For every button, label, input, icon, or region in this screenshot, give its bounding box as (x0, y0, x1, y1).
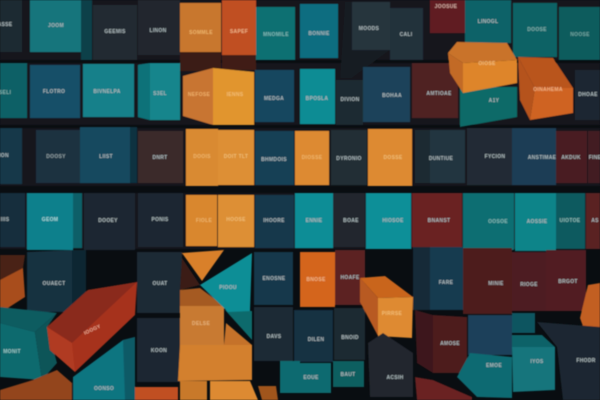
lower right blocks: FARE (439, 280, 454, 286)
lower right blocks: BRGOT (558, 279, 578, 285)
row 3 blocks (0, 127, 600, 186)
row 4 blocks: ENNIE (306, 218, 323, 224)
row 1 blocks (0, 0, 600, 78)
row 2 blocks: BOHAA (382, 93, 402, 99)
row 2 blocks: BPOSLA (306, 96, 328, 102)
row 4 blocks: OOSOE (488, 219, 508, 225)
row 4 blocks: IIIS (1, 217, 10, 223)
central dark columns: OUAT (152, 281, 168, 287)
lower middle blocks: EOUE (303, 375, 319, 381)
row 2 blocks: OINAHEMA (533, 87, 563, 93)
row 1 blocks: JOOM (48, 23, 64, 29)
lower right blocks: ACSIH (386, 375, 404, 381)
row 1 blocks: SAPEF (230, 29, 248, 35)
lower right blocks: FHODR (576, 358, 596, 364)
row 2 blocks: DIVION (340, 97, 360, 103)
row 5 left: broken stacked blocks: IOOGY (83, 323, 102, 337)
row 4 blocks: HIOSOE (382, 218, 404, 224)
lower right blocks: AMOSE (440, 341, 460, 347)
row 3 blocks: ANSTIMAE (528, 155, 557, 161)
row 3 blocks: DIOSSE (302, 155, 323, 161)
row 3 blocks: DOSSE (383, 155, 403, 161)
lower right blocks: IYOS (530, 359, 544, 365)
lower right blocks: MINIE (488, 281, 504, 287)
row 2 blocks: NEFOSE (188, 92, 211, 98)
row 1 blocks: LINON (149, 28, 167, 34)
row 5 left: broken stacked blocks (0, 250, 137, 400)
row 4 blocks: AS (591, 218, 599, 224)
row 3 blocks: DNRT (152, 155, 168, 161)
central dark columns: KOON (151, 348, 167, 354)
row 1 blocks: CALI (400, 32, 413, 38)
row 2 blocks: BIVNELPA (93, 89, 121, 95)
lower middle blocks: ENOSNE (263, 276, 286, 282)
row 3 blocks: DUNTIUE (429, 156, 454, 162)
row 4 blocks: IHOORE (263, 218, 285, 224)
row 2 blocks: DHOAE (578, 92, 598, 98)
row 1 blocks: MOODS (359, 26, 380, 32)
lower middle blocks: HOAFE (340, 275, 360, 281)
row 3 blocks: DYRONIO (336, 156, 362, 162)
row 4 blocks: AOSSIE (527, 219, 548, 225)
row 1 blocks: MNOMILE (263, 32, 289, 38)
row 3 blocks: DOOIS (193, 154, 211, 160)
row 3 blocks: FYCION (485, 154, 505, 160)
row 2 blocks: A1Y (489, 98, 500, 104)
row 1 blocks: NOOSE (570, 32, 590, 38)
row 2 blocks: MEDGA (264, 96, 284, 102)
row 2 blocks: IENNS (227, 92, 244, 98)
row 4 blocks (0, 193, 600, 251)
row 1 blocks: JOOSUE (435, 4, 458, 10)
lower middle blocks: BNOSE (306, 277, 326, 283)
lower middle blocks: DILEN (308, 337, 324, 343)
lower right blocks (368, 247, 600, 400)
row 4 blocks: UIOTOE (560, 218, 581, 224)
row 1 blocks: DOOSE (527, 27, 547, 33)
tilted orange box (360, 276, 413, 338)
row 4 blocks: BOAE (343, 218, 359, 224)
row 3 blocks: LIIST (99, 154, 113, 160)
row 1 blocks: SOMMLE (189, 30, 213, 36)
lower right blocks: RIOGE (520, 282, 538, 288)
lower middle blocks: DAVS (267, 334, 282, 340)
central dark columns (135, 252, 182, 400)
row 1 blocks: LINOGL (478, 19, 498, 25)
lower right blocks: EMOE (486, 363, 502, 369)
row 2 blocks (0, 42, 600, 127)
lower middle blocks: BAUT (340, 372, 356, 378)
row 2 blocks: S3EL (153, 91, 167, 97)
lower middle blocks (254, 250, 365, 393)
row 4 blocks: FIOLE (196, 218, 212, 224)
row 4 blocks: PONIS (151, 217, 169, 223)
row 1 blocks: BONNIE (308, 31, 330, 37)
center orange and teal shard cluster: DELSE (192, 321, 210, 327)
row 3 blocks: BHMDOIS (261, 157, 287, 163)
row 2 blocks: FLOTRO (43, 89, 65, 95)
row 5 left: broken stacked blocks: OUAECT (43, 281, 65, 287)
center orange and teal shard cluster (178, 250, 278, 400)
row 5 left: broken stacked blocks: MONIT (3, 349, 21, 355)
row 3 blocks: DOIT TLT (224, 154, 248, 160)
row 3 blocks: DOOSY (46, 154, 66, 160)
row 2 blocks: OIOSE (478, 61, 496, 67)
row 4 blocks: DOOEY (98, 218, 118, 224)
row 3 blocks: AKDUK (561, 155, 581, 161)
lower middle blocks: BNOID (341, 335, 359, 341)
tilted orange box: PIRRSE (382, 311, 403, 317)
row 1 blocks: GEEMIS (104, 29, 126, 35)
row 4 blocks: BNANST (428, 218, 450, 224)
row 4 blocks: GEOM (42, 217, 58, 223)
row 2 blocks: AMTIOAE (426, 91, 452, 97)
center orange and teal shard cluster: PIOOU (219, 285, 237, 291)
row 4 blocks: HOOSE (226, 217, 246, 223)
row 5 left: broken stacked blocks: OONSO (94, 386, 114, 392)
